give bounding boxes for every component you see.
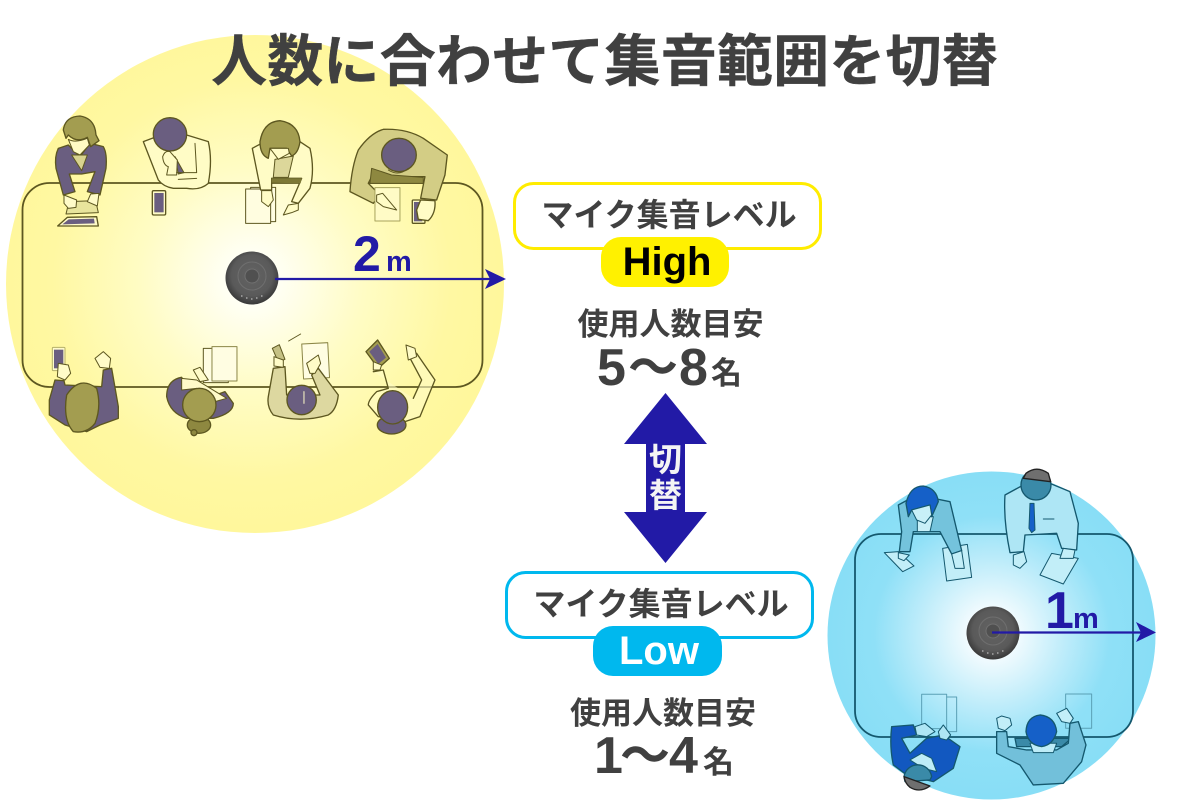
users guideline 1 to 4: 名 — [703, 737, 734, 782]
yellow pickup range circle — [6, 35, 504, 533]
range arrow 1m — [992, 622, 1156, 642]
range arrow 2m — [275, 269, 506, 289]
low level label panel: マイク集音レベル — [533, 579, 789, 625]
people at small table — [884, 469, 1092, 790]
small meeting table — [855, 534, 1133, 737]
bottom row of people at large table — [49, 334, 435, 436]
switch double arrow — [624, 393, 707, 563]
person 9 woman top left — [884, 486, 972, 581]
person 8 with tablet — [366, 340, 435, 434]
label 2m — [353, 226, 412, 282]
low pill — [593, 626, 722, 676]
person 11 woman bottom left — [891, 694, 960, 790]
label 1m — [1045, 582, 1099, 640]
users guideline 5 to 8: 8 — [679, 339, 708, 397]
label 1m: 1 — [1045, 582, 1074, 640]
users guideline 1 to 4: 1 — [594, 727, 623, 785]
users guideline 5 to 8: 〜 — [628, 328, 678, 400]
person 7 with papers and phone — [268, 334, 338, 419]
blue pickup range circle — [828, 472, 1156, 800]
switch double arrow: 切 — [649, 433, 682, 481]
high level label panel — [514, 184, 820, 248]
users guideline 1 to 4: 使用人数目安 — [570, 688, 756, 733]
low pill: Low — [619, 629, 700, 673]
users guideline 5 to 8: 名 — [711, 348, 742, 393]
person 4 with tablet and paper — [350, 129, 447, 223]
person 6 with papers — [167, 347, 237, 436]
users guideline 1 to 4 — [570, 688, 756, 788]
top row of people at large table — [56, 116, 447, 226]
high pill: High — [623, 240, 711, 284]
high pill — [601, 237, 729, 287]
person 12 man bottom right — [997, 694, 1092, 785]
low level label panel — [506, 572, 812, 638]
users guideline 1 to 4: 4 — [669, 727, 698, 785]
users guideline 5 to 8: 5 — [597, 339, 626, 397]
high level label panel: マイク集音レベル — [541, 190, 797, 236]
speaker device high mode — [226, 252, 278, 304]
users guideline 5 to 8: 使用人数目安 — [578, 299, 764, 344]
person 2 thinking with phone — [143, 118, 210, 215]
users guideline 1 to 4: 〜 — [620, 716, 670, 788]
person 10 man with tie — [1005, 469, 1078, 584]
switch double arrow: 替 — [649, 469, 682, 517]
users guideline 5 to 8 — [578, 299, 764, 400]
large meeting table — [22, 183, 482, 387]
title: 人数に合わせて集音範囲を切替 — [211, 17, 998, 98]
person 1 with laptop — [56, 116, 106, 226]
speaker device low mode — [966, 606, 1020, 660]
person 3 with papers — [246, 121, 312, 223]
person 5 with phone — [49, 347, 118, 432]
label 1m: m — [1073, 603, 1099, 635]
label 2m: 2 — [353, 226, 381, 282]
label 2m: m — [386, 246, 412, 278]
